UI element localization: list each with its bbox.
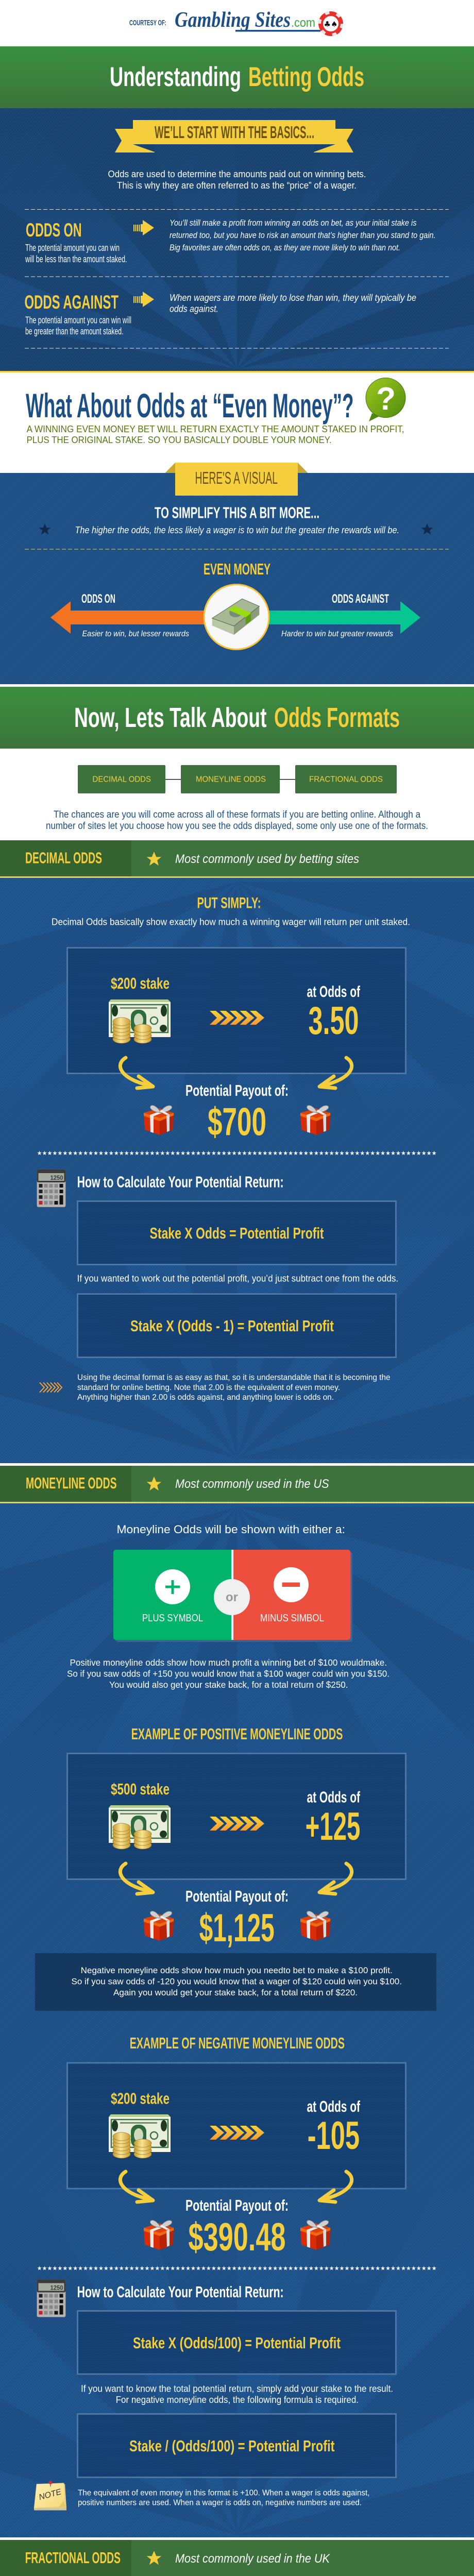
icon: bills and coins bbox=[109, 2114, 171, 2158]
positive example box bbox=[67, 1754, 406, 1879]
total return note: If you want to know the total potential return, simply add your stake to the result. bbox=[81, 2383, 393, 2394]
odds against definition: The potential amount you can win will bbox=[25, 314, 131, 326]
header: courtesy of logo bbox=[129, 8, 343, 36]
negative moneyline explanation: Again you would get your stake back, for a total return of $220. bbox=[113, 1988, 358, 1997]
put simply text: Decimal Odds basically show exactly how much a winning wager will return per unit staked. bbox=[52, 916, 410, 927]
stake label: $200 stake bbox=[111, 974, 170, 992]
odds on definition: The potential amount you can win bbox=[25, 242, 120, 253]
icon: bills and coins bbox=[109, 999, 171, 1043]
icon: poker chip bbox=[318, 11, 343, 36]
formats title: Now, Lets Talk About bbox=[74, 702, 267, 733]
panel: decimal odds bbox=[0, 878, 474, 1463]
odds against caption: Harder to win but greater rewards bbox=[281, 630, 393, 638]
put simply heading: PUT SIMPLY: bbox=[197, 894, 261, 912]
decimal odds header bar bbox=[0, 840, 474, 878]
payout value: $1,125 bbox=[199, 1906, 275, 1950]
fractional odds header bar bbox=[0, 2540, 474, 2576]
decimal summary: standard for online betting. Note that 2.00 is the equivalent of even money. bbox=[77, 1383, 340, 1392]
formula box: stake x odds bbox=[77, 1201, 396, 1264]
icon: star bbox=[147, 1477, 161, 1490]
calculate heading: How to Calculate Your Potential Return: bbox=[77, 1173, 284, 1191]
formula box: odds over 100 bbox=[77, 2311, 396, 2374]
payout value: $390.48 bbox=[189, 2215, 285, 2259]
main title: Understanding bbox=[110, 62, 241, 92]
minus half bbox=[233, 1550, 350, 1640]
formats intro text: The chances are you will come across all of these formats if you are betting online. Although a bbox=[54, 809, 420, 820]
button: moneyline odds bbox=[181, 765, 280, 793]
positive moneyline explanation: Positive moneyline odds show how much profit a winning bet of $100 wouldmake. bbox=[70, 1657, 387, 1668]
icon: right gift bbox=[300, 2220, 330, 2250]
payout label: Potential Payout of: bbox=[185, 1887, 289, 1905]
moneyline note text bbox=[78, 2488, 370, 2507]
odds label: at Odds of bbox=[307, 2097, 360, 2115]
odds on label: ODDS ON bbox=[81, 592, 115, 606]
plus half: PLUS SYMBOL bbox=[142, 1613, 203, 1624]
arrow: odds on orange bbox=[50, 601, 206, 634]
chevrons bbox=[210, 2126, 264, 2140]
icon: star bbox=[147, 852, 161, 866]
formula box: stake x odds: Stake X Odds = Potential Profit bbox=[149, 1224, 324, 1242]
button: moneyline odds: MONEYLINE ODDS bbox=[196, 775, 266, 784]
payout value: $700 bbox=[208, 1100, 266, 1144]
icon: right gift bbox=[300, 1911, 330, 1941]
decimal summary: Using the decimal format is as easy as that, so it is understandable that it is becoming the bbox=[77, 1374, 391, 1382]
icon: left gift bbox=[144, 1105, 174, 1135]
arrow: odds against green bbox=[267, 601, 420, 634]
main title: Betting Odds bbox=[248, 62, 364, 92]
calculate heading: How to Calculate Your Potential Return: bbox=[77, 2283, 284, 2301]
positive moneyline explanation: So if you saw odds of +150 you would know that a $100 wager could win you $150. bbox=[67, 1668, 390, 1679]
section name: MONEYLINE ODDS bbox=[26, 1474, 116, 1492]
simplify heading: TO SIMPLIFY THIS A BIT MORE... bbox=[155, 504, 319, 521]
intro text: This is why they are often referred to as the “price” of a wager. bbox=[117, 180, 357, 191]
icon: right star bbox=[421, 523, 433, 535]
ribbon banner bbox=[115, 120, 353, 152]
icon: calculator: 1250 bbox=[50, 1174, 63, 1181]
section tagline: Most commonly used by betting sites bbox=[175, 852, 359, 866]
odds against label: ODDS AGAINST bbox=[332, 592, 389, 606]
panel: even money intro bbox=[26, 378, 405, 445]
moneyline intro heading: Moneyline Odds will be shown with either a: bbox=[116, 1523, 345, 1536]
ribbon banner: WE’LL START WITH THE BASICS... bbox=[155, 123, 314, 142]
arrow: left curved bbox=[120, 2172, 153, 2202]
button: decimal odds bbox=[78, 765, 165, 793]
odds on caption: Easier to win, but lesser rewards bbox=[82, 630, 189, 638]
icon: left gift bbox=[144, 2220, 174, 2250]
odds value: -105 bbox=[308, 2114, 360, 2158]
total return note bbox=[81, 2383, 393, 2405]
or badge bbox=[214, 1579, 250, 1615]
section tagline: Most commonly used in the UK bbox=[175, 2552, 330, 2566]
simplify text: The higher the odds, the less likely a wager is to win but the greater the rewards will be. bbox=[75, 524, 399, 535]
formula box: odds over 100: Stake X (Odds/100) = Potential Profit bbox=[133, 2334, 341, 2352]
negative moneyline explanation: Negative moneyline odds show how much you needto bet to make a $100 profit. bbox=[81, 1965, 393, 1975]
formula box: divide by odds bbox=[77, 2414, 396, 2477]
icon: small chevrons bbox=[40, 1383, 62, 1392]
icon: question bubble bbox=[366, 378, 405, 421]
visual tab: HERE'S A VISUAL bbox=[195, 468, 278, 487]
odds on explanation bbox=[170, 218, 436, 252]
moneyline note text: The equivalent of even money in this format is +100. When a wager is odds against, bbox=[78, 2488, 370, 2498]
chevrons bbox=[210, 1817, 264, 1831]
odds label: at Odds of bbox=[307, 982, 360, 1001]
negative example heading: EXAMPLE OF NEGATIVE MONEYLINE ODDS bbox=[130, 2034, 345, 2052]
arrow: right curved bbox=[319, 2172, 352, 2202]
odds value: 3.50 bbox=[308, 999, 359, 1043]
subtract note: If you wanted to work out the potential profit, you’d just subtract one from the odds. bbox=[77, 1274, 398, 1284]
negative moneyline explanation: So if you saw odds of -120 you would know that a wager of $120 could win you $100. bbox=[71, 1976, 402, 1987]
star divider: ★★★★★★★★★★★★★★★★★★★★★★★★★★★★★★★★★★★★★★★★★★★★★★★★★★★★★★★★★★★★★★★★★★★★★★★★★★★★★★ bbox=[37, 1149, 437, 1157]
moneyline odds header bar bbox=[0, 1466, 474, 1503]
decimal summary bbox=[77, 1374, 391, 1402]
odds on heading: ODDS ON bbox=[26, 219, 81, 241]
arrow: left curved bbox=[120, 1863, 153, 1894]
panel: basics bbox=[0, 108, 474, 372]
negative moneyline explanation bbox=[35, 1953, 436, 2011]
odds value: +125 bbox=[306, 1805, 360, 1849]
panel: moneyline odds bbox=[0, 1503, 474, 2537]
formula box: stake x odds minus one: Stake X (Odds - 1) = Potential Profit bbox=[130, 1317, 334, 1335]
odds on explanation: You’ll still make a profit from winning an odds on bet, as your initial stake is bbox=[170, 218, 417, 228]
payout label: Potential Payout of: bbox=[185, 1081, 289, 1099]
icon: money stack bbox=[204, 584, 269, 649]
logo dot com: .com bbox=[291, 16, 315, 30]
positive moneyline explanation: You would also get your stake back, for a total return of $250. bbox=[109, 1680, 348, 1690]
button: fractional odds bbox=[295, 765, 397, 793]
section tagline: Most commonly used in the US bbox=[175, 1477, 329, 1491]
icon: left star bbox=[39, 523, 50, 535]
arrow: right curved bbox=[319, 1863, 352, 1894]
negative example box bbox=[67, 2063, 406, 2189]
icon: calculator bbox=[37, 1170, 66, 1207]
odds against heading: ODDS AGAINST bbox=[25, 292, 118, 313]
formats intro text bbox=[46, 809, 428, 832]
logo underline bbox=[235, 30, 320, 32]
even money label: EVEN MONEY bbox=[204, 560, 270, 578]
icon: right gift bbox=[300, 1105, 330, 1135]
formula box: divide by odds: Stake / (Odds/100) = Potential Profit bbox=[129, 2437, 335, 2455]
panel: here's a visual bbox=[0, 463, 474, 684]
icon: note bbox=[34, 2481, 66, 2510]
section name: FRACTIONAL ODDS bbox=[25, 2549, 121, 2567]
arrow: odds on bbox=[133, 220, 154, 235]
chevrons bbox=[210, 1011, 264, 1025]
stake label: $500 stake bbox=[111, 1780, 170, 1798]
icon: question bubble: ? bbox=[376, 381, 396, 417]
star divider: ★★★★★★★★★★★★★★★★★★★★★★★★★★★★★★★★★★★★★★★★★★★★★★★★★★★★★★★★★★★★★★★★★★★★★★★★★★★★★★ bbox=[37, 2265, 437, 2272]
title banner bbox=[0, 46, 474, 108]
odds on explanation: returned too, but you have to risk an amount that’s higher than you stand to gain. bbox=[170, 230, 436, 240]
positive example heading: EXAMPLE OF POSITIVE MONEYLINE ODDS bbox=[131, 1725, 343, 1743]
formats intro text: number of sites let you choose how you see the odds displayed, some only use one of the formats. bbox=[46, 821, 428, 832]
even money description: PLUS THE ORIGINAL STAKE. SO YOU BASICALLY DOUBLE YOUR MONEY. bbox=[27, 434, 332, 445]
odds on definition bbox=[25, 242, 127, 264]
odds against explanation: When wagers are more likely to lose than win, they will typically be bbox=[170, 293, 416, 303]
logo wordmark: Gambling Sites bbox=[175, 8, 291, 32]
format buttons bbox=[78, 765, 397, 793]
stake label: $200 stake bbox=[111, 2090, 170, 2107]
minus half: MINUS SIMBOL bbox=[260, 1613, 324, 1624]
button: fractional odds: FRACTIONAL ODDS bbox=[309, 775, 383, 784]
icon: left gift bbox=[144, 1911, 174, 1941]
section name: DECIMAL ODDS bbox=[25, 849, 102, 867]
odds on definition: will be less than the amount staked. bbox=[25, 253, 127, 264]
icon: poker chip: ♣♠ bbox=[324, 20, 337, 29]
visual tab bbox=[165, 463, 308, 496]
odds on explanation: Big favorites are often odds on, as they are more likely to win than not. bbox=[170, 243, 400, 252]
even money description: A WINNING EVEN MONEY BET WILL RETURN EXACTLY THE AMOUNT STAKED IN PROFIT, bbox=[27, 423, 404, 434]
positive moneyline explanation bbox=[67, 1657, 390, 1690]
icon: calculator: 1250 bbox=[50, 2284, 63, 2292]
odds against explanation bbox=[170, 293, 416, 314]
odds label: at Odds of bbox=[307, 1788, 360, 1806]
payout label: Potential Payout of: bbox=[185, 2196, 289, 2214]
formula box: stake x odds minus one bbox=[77, 1294, 396, 1357]
icon: star bbox=[147, 2551, 161, 2565]
plus half bbox=[113, 1550, 231, 1640]
formats title: Odds Formats bbox=[274, 702, 400, 733]
courtesy label: COURTESY OF: bbox=[129, 19, 166, 27]
icon: calculator bbox=[37, 2279, 66, 2317]
decimal summary: Anything higher than 2.00 is odds against, and anything lower is odds on. bbox=[77, 1393, 334, 1402]
arrow: left curved bbox=[120, 1058, 153, 1088]
arrow: odds against bbox=[133, 292, 154, 307]
moneyline note text: positive numbers are used. When a wager is odds on, negative numbers are used. bbox=[78, 2499, 362, 2507]
intro text bbox=[108, 169, 366, 191]
arrow: right curved bbox=[319, 1058, 352, 1088]
icon: bills and coins bbox=[109, 1805, 171, 1849]
icon: note: NOTE bbox=[38, 2487, 62, 2502]
odds against definition: be greater than the amount staked. bbox=[25, 326, 124, 336]
intro text: Odds are used to determine the amounts paid out on winning bets. bbox=[108, 169, 366, 179]
odds against explanation: odds against. bbox=[170, 304, 218, 314]
example box bbox=[67, 948, 406, 1074]
even money description bbox=[27, 423, 404, 445]
total return note: For negative moneyline odds, the following formula is required. bbox=[116, 2395, 359, 2405]
symbol card bbox=[113, 1550, 352, 1642]
formats banner bbox=[0, 687, 474, 749]
odds against definition bbox=[25, 314, 131, 336]
or badge: or bbox=[226, 1590, 238, 1604]
button: decimal odds: DECIMAL ODDS bbox=[93, 775, 151, 784]
